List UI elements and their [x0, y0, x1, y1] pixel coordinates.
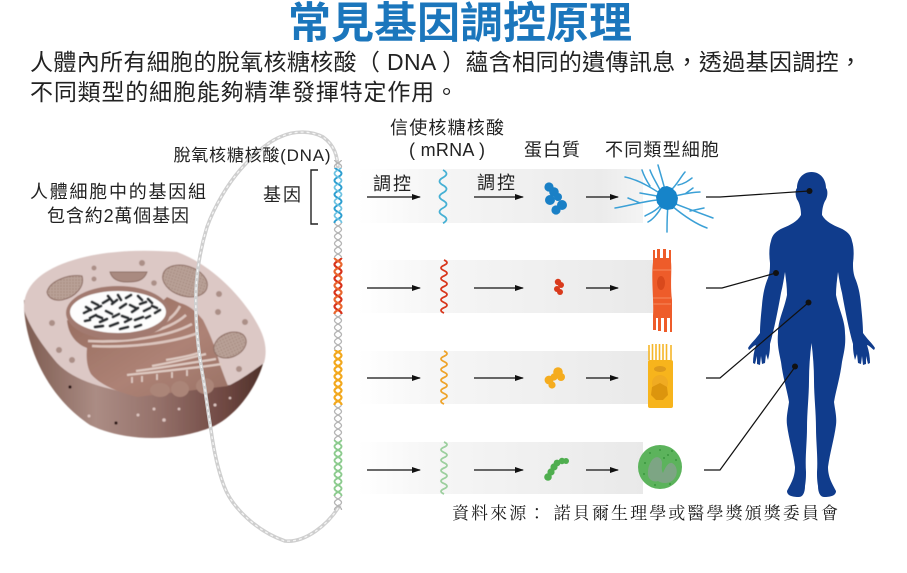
cell: muscle — [652, 249, 672, 332]
nucleus — [66, 286, 170, 340]
cell: white blood cell — [638, 445, 682, 489]
chromosomes — [84, 295, 160, 329]
source note: 資料來源： 諾貝爾生理學或醫學獎頒獎委員會 — [452, 504, 838, 523]
mRNA strands — [440, 170, 447, 494]
column and side labels: 脫氧核糖核酸(DNA) — [174, 146, 330, 165]
column and side labels: ( mRNA ) — [409, 140, 485, 160]
vesicles — [49, 260, 248, 372]
mitochondria — [47, 260, 250, 363]
cell interior cut-out — [67, 297, 228, 397]
row background bands — [358, 169, 653, 494]
column and side labels: 信使核糖核酸 — [390, 118, 504, 138]
cell: neuron — [615, 165, 713, 232]
column and side labels: 包含約2萬個基因 — [47, 206, 189, 226]
protein blobs — [544, 182, 569, 481]
column and side labels — [30, 118, 719, 226]
DNA vertical helix with coloured genes — [332, 160, 344, 510]
golgi stacks — [127, 353, 222, 375]
cell: epithelial — [648, 344, 673, 408]
lower organelle domes — [150, 378, 214, 397]
column and side labels: 調控 — [373, 174, 411, 194]
intro text block — [30, 49, 862, 105]
gene bracket — [311, 170, 318, 224]
column and side labels: 蛋白質 — [524, 140, 580, 160]
column and side labels: 人體細胞中的基因組 — [30, 182, 206, 202]
column and side labels: 基因 — [263, 185, 301, 205]
title: 常見基因調控原理 — [288, 0, 632, 48]
intro text block: 人體內所有細胞的脫氧核糖核酸（ DNA ）蘊含相同的遺傳訊息，透過基因調控， — [30, 49, 862, 75]
human body silhouette — [748, 172, 875, 497]
flow arrows — [367, 197, 618, 470]
cell lower bowl — [24, 300, 264, 438]
illustration: cell cross-section — [24, 251, 266, 438]
cell top surface — [24, 251, 266, 395]
intro text block: 不同類型的細胞能夠精準發揮特定作用。 — [30, 79, 458, 105]
rough endoplasmic reticulum — [88, 306, 198, 346]
DNA strand loop — [196, 132, 340, 541]
leader lines to body — [704, 188, 812, 470]
column and side labels: 不同類型細胞 — [605, 140, 719, 160]
column and side labels: 調控 — [477, 173, 515, 193]
bowl granules — [68, 385, 231, 425]
